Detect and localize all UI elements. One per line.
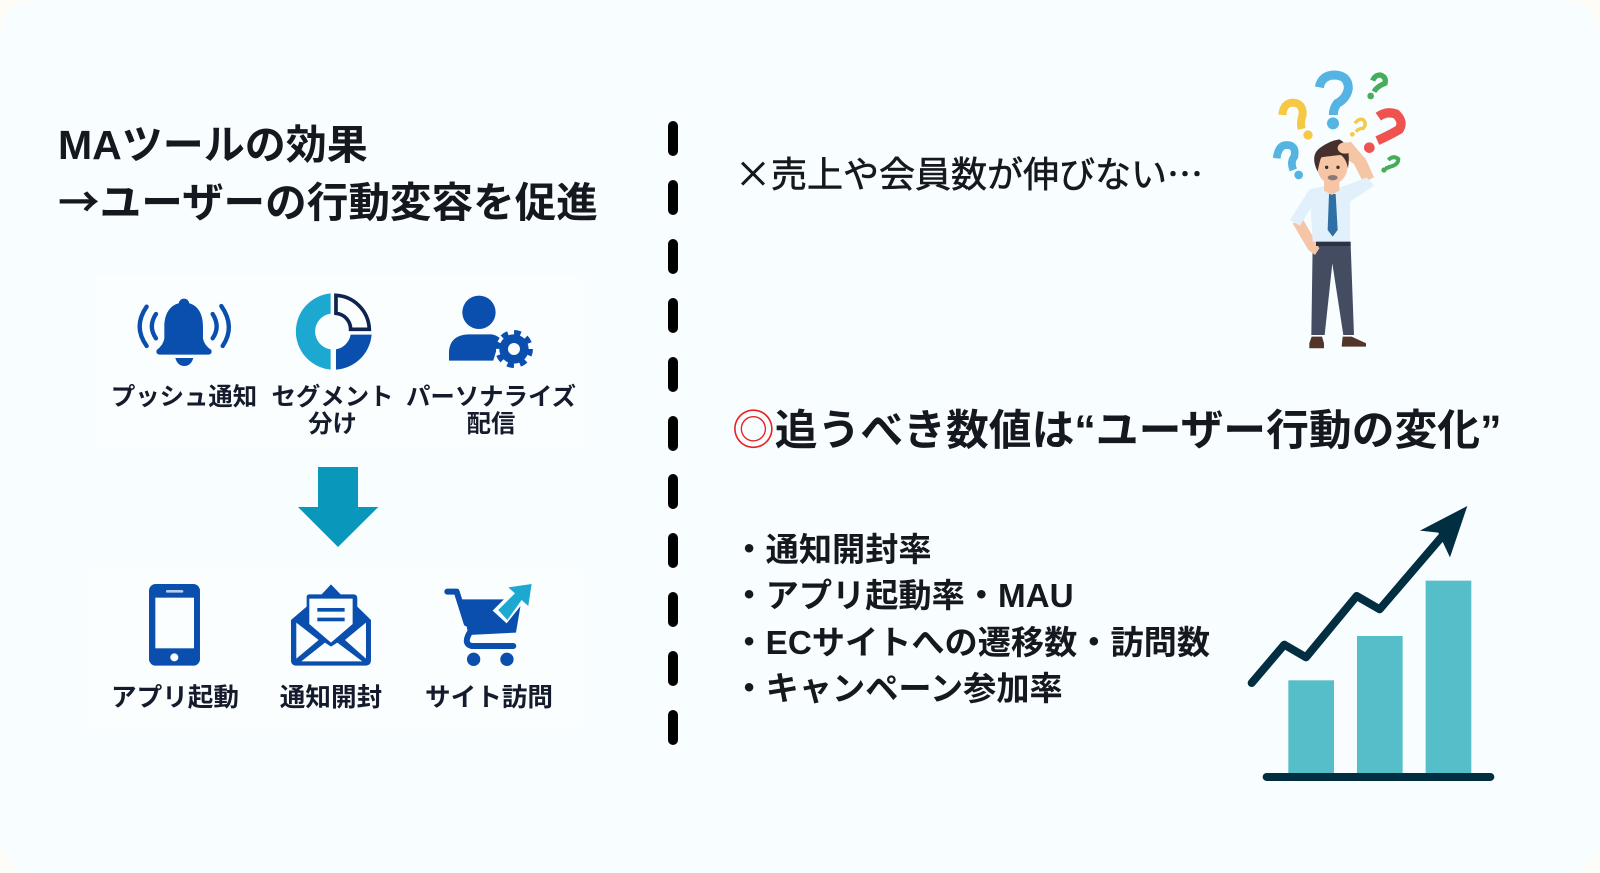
hair	[1314, 139, 1349, 172]
icon: user with gear	[449, 296, 532, 367]
legs	[1311, 245, 1354, 335]
mouth	[1328, 175, 1338, 180]
arrow: down	[298, 467, 378, 547]
icon: smartphone	[149, 584, 200, 666]
heading: what to track: ◎追うべき数値は“ユーザー行動の変化”	[732, 407, 1502, 455]
question marks	[1277, 75, 1401, 170]
label: segmentation	[272, 383, 393, 438]
label: personalized delivery	[406, 383, 576, 438]
label: notification opened: 通知開封	[280, 683, 382, 712]
neck and face	[1324, 180, 1339, 195]
icon: segment donut	[296, 293, 372, 370]
title: MAツールの効果	[58, 122, 368, 168]
panel: user actions	[87, 568, 582, 727]
list: metrics: ・キャンペーン参加率	[732, 671, 1063, 708]
hand	[1338, 142, 1352, 154]
right arm	[1338, 142, 1374, 183]
tie	[1328, 194, 1338, 237]
left arm	[1293, 220, 1319, 255]
label: segmentation: セグメント	[272, 383, 393, 411]
text: problem statement: ×売上や会員数が伸びない…	[735, 146, 1203, 198]
label: push notification: プッシュ通知	[111, 384, 257, 411]
list: metrics: ・アプリ起動率・MAU	[732, 578, 1074, 615]
eyes	[1325, 166, 1328, 169]
list: metrics: ・通知開封率	[732, 532, 932, 569]
label: personalized delivery: 配信	[467, 411, 515, 438]
chart: rising bars with arrow	[1252, 506, 1494, 781]
panel: MA features	[94, 275, 582, 447]
title	[58, 122, 598, 229]
icon: bell	[140, 299, 229, 366]
illustration: confused businessman	[1277, 75, 1401, 348]
divider: dashed line	[668, 121, 678, 745]
label: personalized delivery: パーソナライズ	[406, 383, 576, 411]
list: metrics: ・ECサイトへの遷移数・訪問数	[732, 625, 1210, 662]
belt	[1316, 242, 1351, 246]
label: segmentation: 分け	[308, 411, 357, 438]
title: →ユーザーの行動変容を促進	[58, 169, 598, 229]
shirt	[1290, 177, 1374, 242]
list: metrics	[732, 532, 1210, 708]
label: app launch: アプリ起動	[111, 683, 239, 712]
icon: open envelope	[291, 584, 371, 666]
icon: cart with arrow	[447, 582, 533, 666]
shoes	[1309, 337, 1324, 348]
label: site visit: サイト訪問	[425, 683, 553, 712]
